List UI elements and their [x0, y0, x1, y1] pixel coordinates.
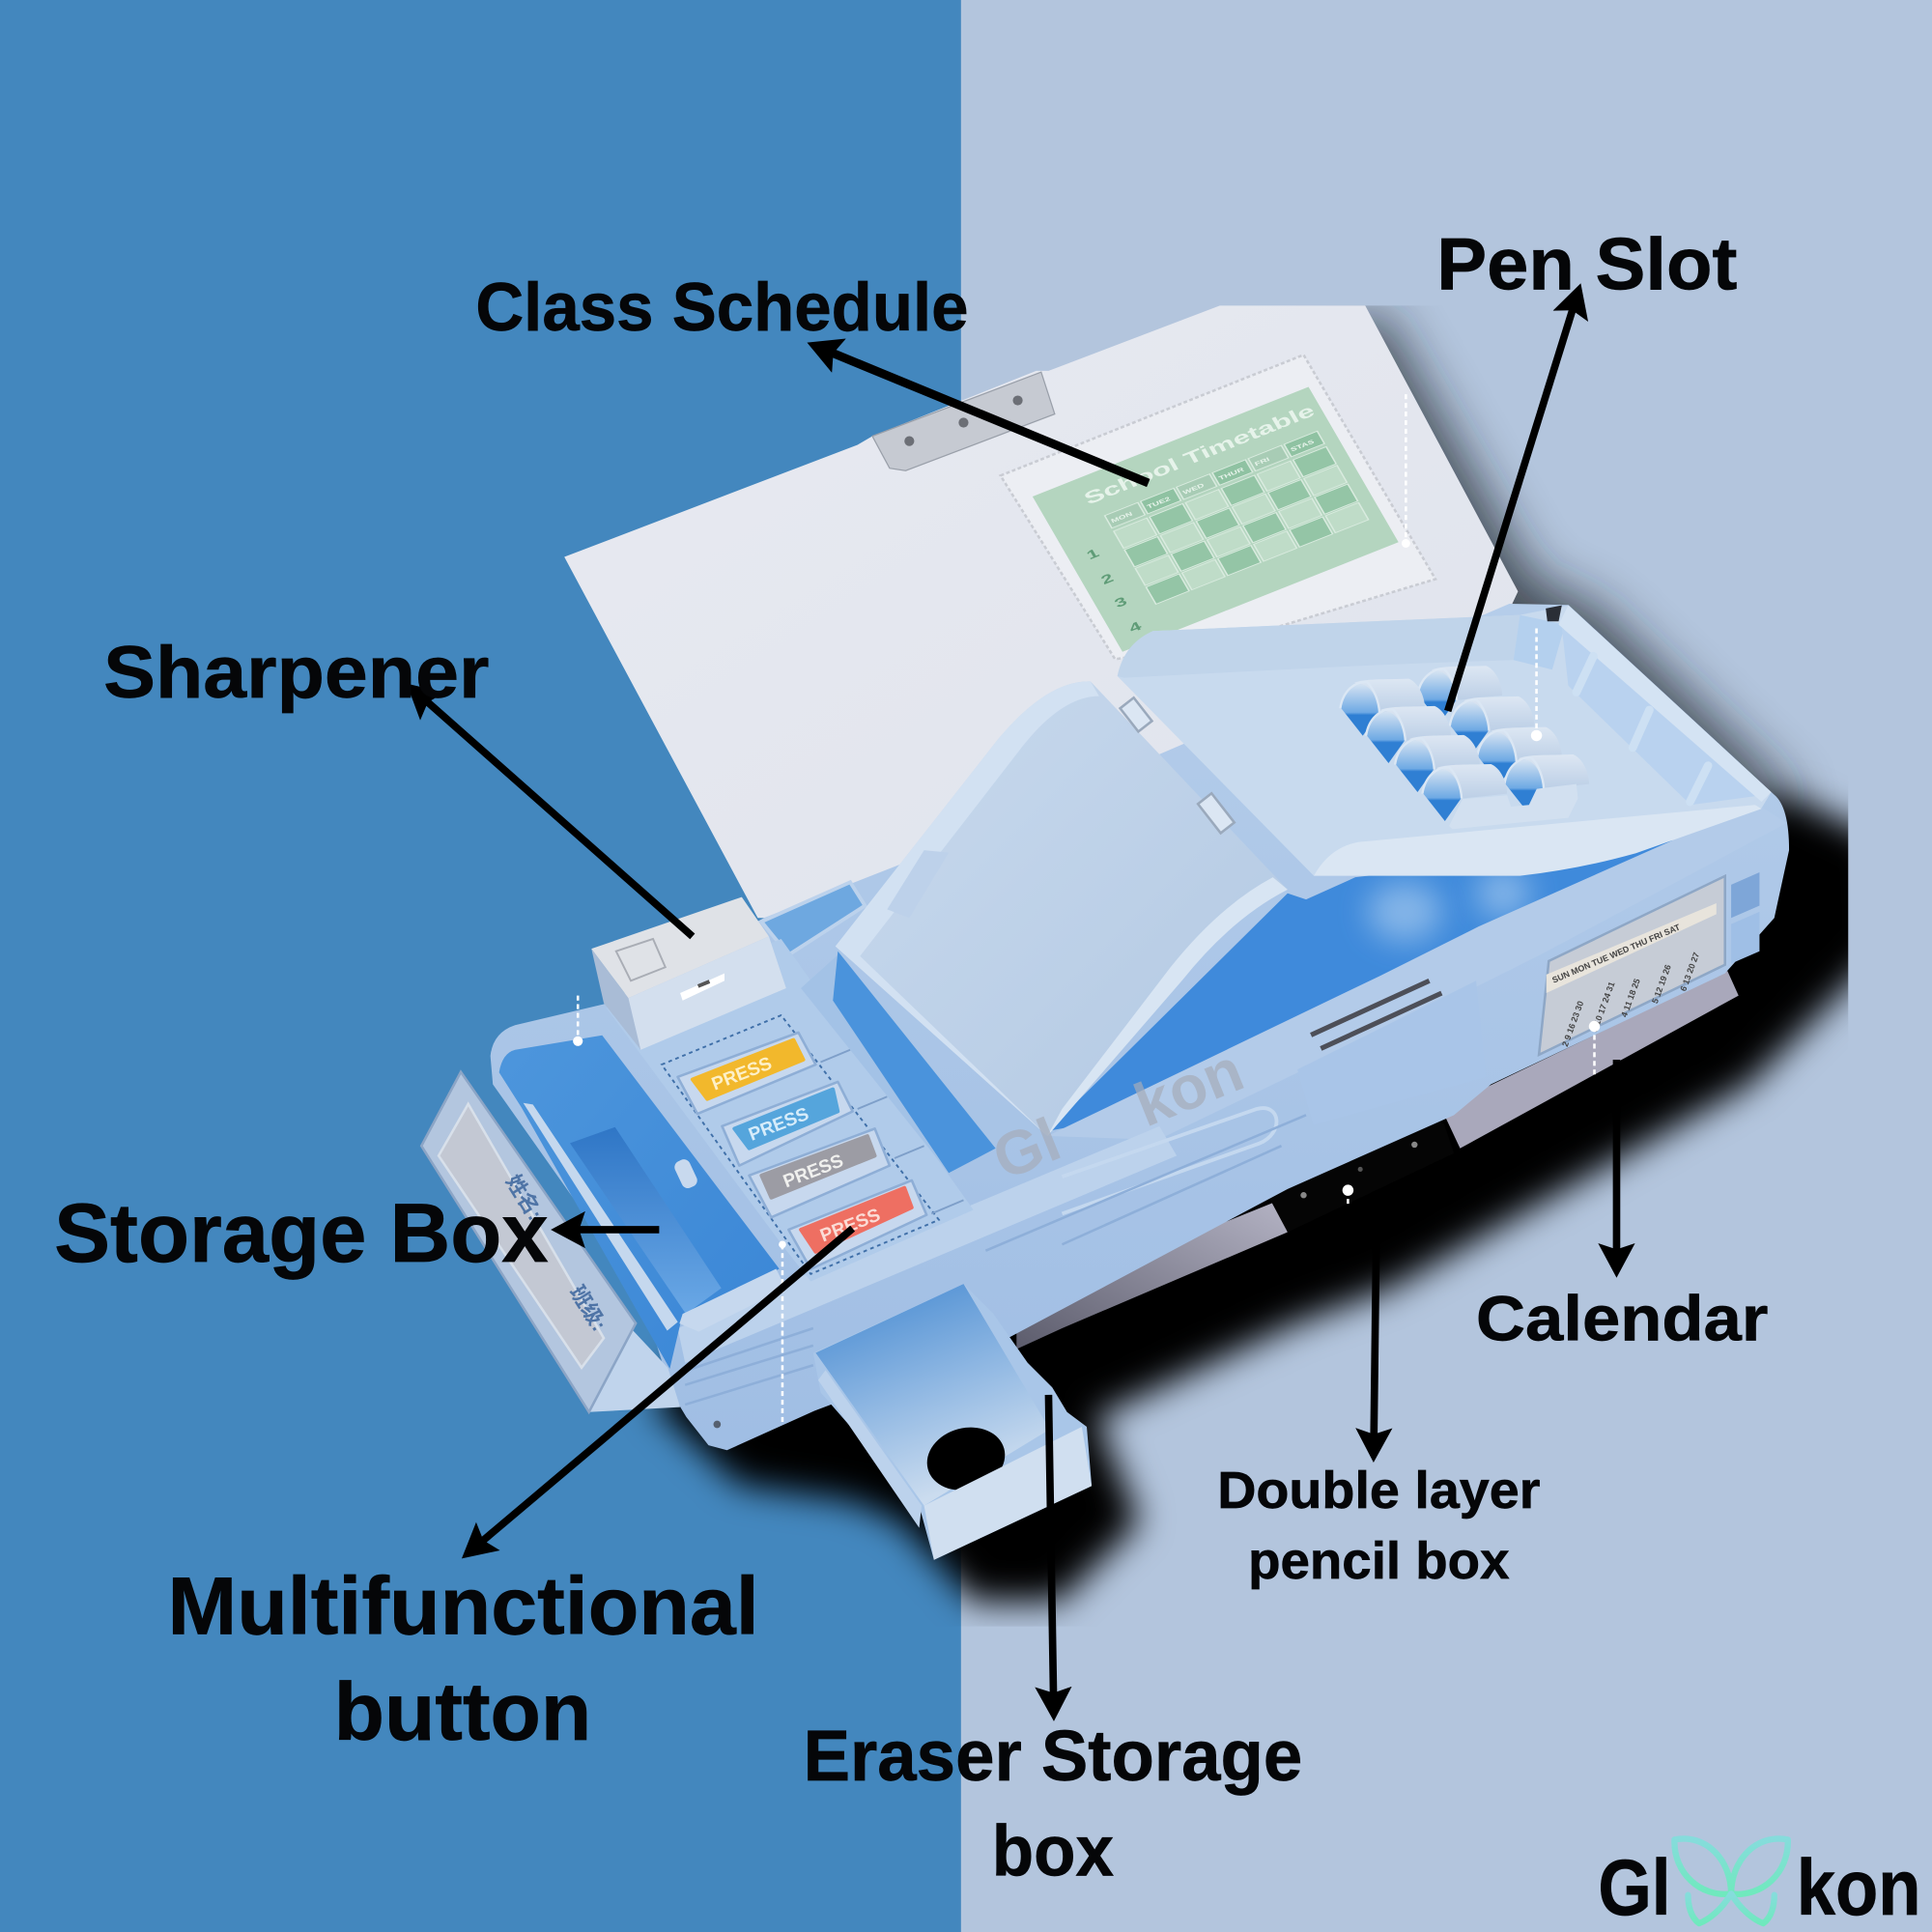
- pen loop rear left: [1340, 679, 1425, 736]
- storage box door: 姓名:: [501, 1170, 548, 1224]
- label: Class Schedule: Class Schedule: [475, 269, 969, 345]
- storage box compartment: [499, 1036, 785, 1369]
- watermark Glokon: kon: [1124, 1035, 1253, 1140]
- pen loop second left: [1366, 706, 1451, 763]
- label: Sharpener: Sharpener: [103, 632, 489, 714]
- blue press button: [722, 1082, 853, 1166]
- black clip: [1269, 1117, 1454, 1233]
- soft upper shadow of lid and tray: [1366, 305, 1817, 811]
- pen loop third right: [1477, 727, 1562, 784]
- label: Multifunctional button: button: [334, 1666, 591, 1757]
- clear sleeve: [1001, 355, 1435, 659]
- label: Eraser Storage box: box: [992, 1810, 1114, 1890]
- school timetable card: 4: [1126, 618, 1144, 636]
- red press button: [788, 1180, 926, 1269]
- calendar: 4 11 18 25: [1619, 978, 1642, 1018]
- school timetable card: 1: [1084, 546, 1102, 562]
- label: Multifunctional button: Multifunctional: [167, 1560, 759, 1651]
- hinges between flaps: [1121, 697, 1235, 833]
- arrow: eraser storage box: [1048, 1395, 1054, 1696]
- school timetable card: TUE2: [1146, 496, 1172, 510]
- label: Eraser Storage box: Eraser Storage: [804, 1716, 1302, 1796]
- calendar: [1539, 876, 1725, 1055]
- tray floor: [1118, 606, 1772, 876]
- school timetable card: 2: [1098, 571, 1117, 587]
- label: Eraser Storage box: [804, 1716, 1302, 1890]
- logo: Glokon: [1598, 1838, 1921, 1932]
- school timetable card: STAS: [1290, 439, 1316, 453]
- underside second layer lower: [1016, 1202, 1288, 1350]
- pen loop third left: [1395, 735, 1480, 792]
- arrow: double layer pencil box: [1374, 1238, 1377, 1438]
- callout dots and dashed leaders: [573, 394, 1600, 1424]
- watermark Glokon: [983, 1035, 1253, 1193]
- side wall: [1562, 628, 1762, 805]
- middle compartment: [801, 952, 996, 1173]
- label: Pen Slot: Pen Slot: [1436, 224, 1737, 306]
- pen loop rear right: [1417, 666, 1502, 723]
- school timetable card: [1033, 387, 1399, 652]
- school timetable card: WED: [1181, 482, 1206, 496]
- pen loop fourth left: [1422, 764, 1507, 821]
- eraser storage drawer: [813, 1284, 1092, 1560]
- gray press button: PRESS: [781, 1151, 846, 1192]
- school timetable card: School Timetable: [1081, 401, 1319, 509]
- corner hook: [1514, 615, 1565, 669]
- school timetable card: 3: [1112, 594, 1130, 611]
- pen tray with loops and side wall: [1118, 606, 1772, 876]
- drop shadow of pencil box: [653, 795, 1886, 1602]
- tray back rim: [1118, 615, 1520, 678]
- label: Multifunctional button: [167, 1560, 759, 1757]
- label: Double layer pencil box: [1217, 1463, 1541, 1590]
- red press button: PRESS: [817, 1205, 884, 1246]
- arrow: sharpener: [425, 699, 693, 936]
- label: Storage Box: Storage Box: [54, 1186, 549, 1280]
- arrow: multifunctional button: [480, 1229, 853, 1543]
- blue press button: PRESS: [746, 1104, 812, 1146]
- gray press button: [750, 1128, 890, 1217]
- yellow press button: [678, 1033, 815, 1114]
- school timetable card: THUR: [1217, 467, 1245, 481]
- storage box door: 班级:: [565, 1281, 611, 1335]
- wall ticks: [1577, 656, 1708, 802]
- calendar: 5 12 19 26: [1650, 963, 1673, 1005]
- label: Calendar: Calendar: [1476, 1284, 1768, 1355]
- sharpener: [591, 897, 786, 1050]
- arrow: pen slot: [1448, 307, 1574, 711]
- storage box door: [421, 1072, 680, 1412]
- background: blue left half: [0, 0, 961, 1932]
- rear rim behind flaps: [761, 882, 865, 955]
- yellow press button: PRESS: [709, 1054, 775, 1094]
- label: Double layer pencil box: Double layer: [1217, 1463, 1541, 1520]
- white open lid: [564, 305, 1518, 918]
- main case body: [491, 604, 1789, 1450]
- front wall details: [685, 872, 1759, 1428]
- school timetable card: FRI: [1254, 456, 1271, 468]
- pencil box photo illustration: [421, 305, 1789, 1560]
- inner deep blue cavity: [1047, 838, 1694, 1131]
- pen loop second right: [1450, 696, 1534, 753]
- metal hinge: [872, 372, 1055, 470]
- calendar: 3 10 17 24 31: [1590, 980, 1617, 1034]
- watermark Glokon: Gl: [983, 1104, 1069, 1193]
- calendar: 6 13 20 27: [1678, 951, 1701, 992]
- front rim highlight: [1047, 804, 1786, 1140]
- pen loop fourth right: [1504, 754, 1589, 811]
- arrow: storage box: [576, 1227, 659, 1233]
- logo: Glokon: Gl: [1598, 1844, 1671, 1932]
- calendar: 2 9 16 23 30: [1560, 1000, 1585, 1048]
- underside second layer upper: [1441, 971, 1739, 1149]
- tray curved lip: [1314, 805, 1762, 876]
- eraser hole: [920, 1419, 1012, 1499]
- school timetable card: MON: [1110, 511, 1134, 525]
- arrow: class schedule: [830, 352, 1149, 483]
- loop base: [1449, 784, 1577, 829]
- label: Double layer pencil box: pencil box: [1248, 1533, 1510, 1590]
- arrow: calendar: [1613, 1060, 1619, 1253]
- icon: butterfly: [1674, 1838, 1788, 1923]
- calendar: SUN MON TUE WED THU FRI SAT: [1550, 922, 1682, 985]
- left folding flap: [836, 681, 1288, 1136]
- front lip of case: [678, 1126, 1177, 1363]
- press button panel: [607, 939, 974, 1282]
- background: pale right half: [961, 0, 1932, 1932]
